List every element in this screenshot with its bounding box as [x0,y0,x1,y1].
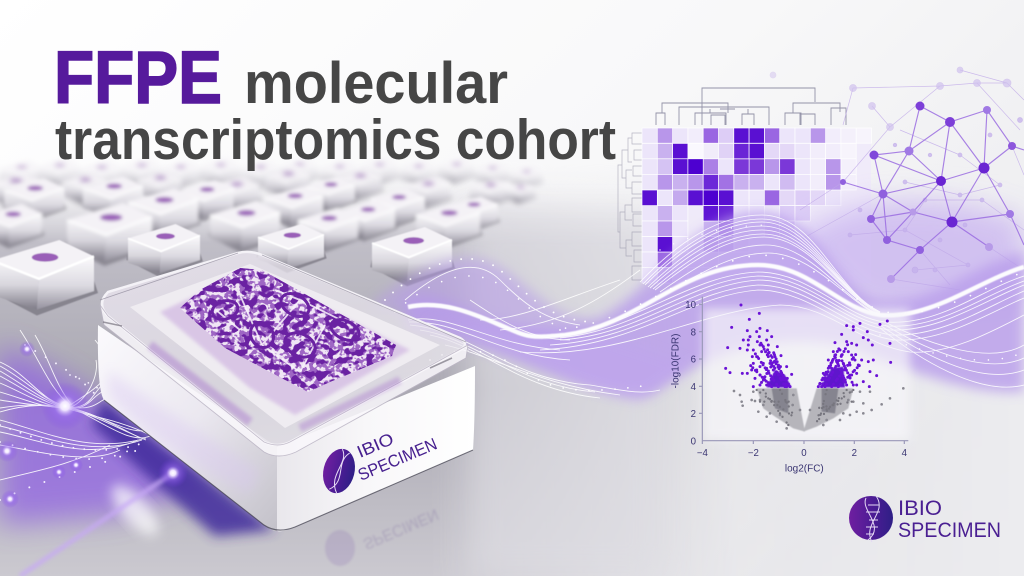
left purple scatter [726,305,792,387]
hero FFPE block [98,252,475,566]
stream fibres [0,330,150,480]
tissue pale halo [160,270,410,415]
x tick labels: 4 [902,448,908,459]
block left face [98,325,277,531]
glass lid [100,252,468,456]
bright floor highlight [104,478,166,542]
block purple edge glow [108,370,260,495]
left dense purple cloud [767,370,792,387]
tissue white veins [210,290,345,372]
network edges [843,106,1024,279]
x axis title: log2(FC) [785,463,824,474]
faint network layer [770,67,1024,290]
metal floor [0,187,732,576]
wave purple haze [405,212,1024,395]
floor right shading [470,215,660,576]
heatmap backing [642,128,871,283]
logo SPECIMEN: SPECIMEN [355,434,440,485]
plot white backing [703,308,910,440]
x tick labels: −4 [697,448,708,459]
block bottom rim [104,400,473,530]
block right face [277,366,475,531]
wave fibres [405,215,1024,398]
y tick labels: 8 [691,327,696,338]
wave lower haze [420,320,690,400]
axes [699,297,908,444]
right purple scatter [820,321,891,387]
dark grey core [772,388,838,413]
title molecular: molecular [244,51,508,116]
front row of blocks [0,224,455,315]
lid wax surface [130,264,440,428]
x tick labels: −2 [748,448,759,459]
grey scatter [734,388,903,428]
middle rear row of blocks [0,166,536,212]
rear row of blocks [0,158,543,191]
volcano plot [671,297,910,474]
sample block array [0,158,543,315]
grey core dots [757,390,853,425]
y tick labels: 4 [691,382,697,393]
corner logo IBIO: IBIO [898,497,942,520]
lid highlights [100,253,466,342]
network lilac haze [790,200,1024,313]
x tick labels [697,448,908,459]
title FFPE: FFPE [54,36,222,119]
wave bright streak [408,265,1024,337]
molecular network [770,67,1024,313]
heatmap [642,128,872,283]
logo IBIO: IBIO [354,429,397,462]
stream particles [0,345,150,500]
title [54,36,616,172]
lid top [102,252,465,445]
y tick labels: 6 [691,355,696,366]
lid purple inner band [150,345,250,422]
corner logo [849,496,1001,542]
light beam [20,473,173,576]
purple significant points [726,305,891,387]
block logo [319,429,440,497]
grey non-significant points [734,388,903,432]
logo wordmark [354,429,440,485]
lid corner reflections [103,322,452,368]
y tick labels: 0 [691,436,696,447]
tissue glands [210,289,362,362]
lid front edge [100,305,468,456]
corner logo SPECIMEN: SPECIMEN [898,519,1001,542]
lid front stain band [300,380,400,428]
y tick labels: 2 [691,409,696,420]
y tick labels: 10 [685,300,696,311]
wave upper particle haze [370,258,600,345]
wave particles [385,225,1024,390]
block reflection [325,505,441,566]
logo mark [319,445,359,497]
dendrogram: top [656,88,846,125]
reflected logo text: SPECIMEN [360,505,441,552]
y tick labels [685,300,697,447]
purple floor glow [0,345,210,525]
y axis title: -log10(FDR) [671,334,682,388]
stream flares [0,341,188,508]
x tick labels: 0 [801,448,807,459]
right dense purple cloud [820,367,845,387]
left dense scatter [750,342,790,387]
reflected logo mark [325,530,355,566]
tissue stain [180,268,396,392]
flowing data wave [370,212,1024,400]
right dense scatter [818,343,860,387]
tissue section [180,268,396,392]
dendrogram: left [618,133,642,280]
x tick labels: 2 [852,448,857,459]
corner logo mark [849,496,893,542]
floor light streams [0,330,275,576]
grey clouds [757,388,853,432]
title transcriptomics cohort: transcriptomics cohort [55,108,616,172]
network nodes [840,102,1016,283]
block shadow [92,398,275,536]
tissue stain light [180,268,396,392]
middle row of blocks [0,176,500,266]
